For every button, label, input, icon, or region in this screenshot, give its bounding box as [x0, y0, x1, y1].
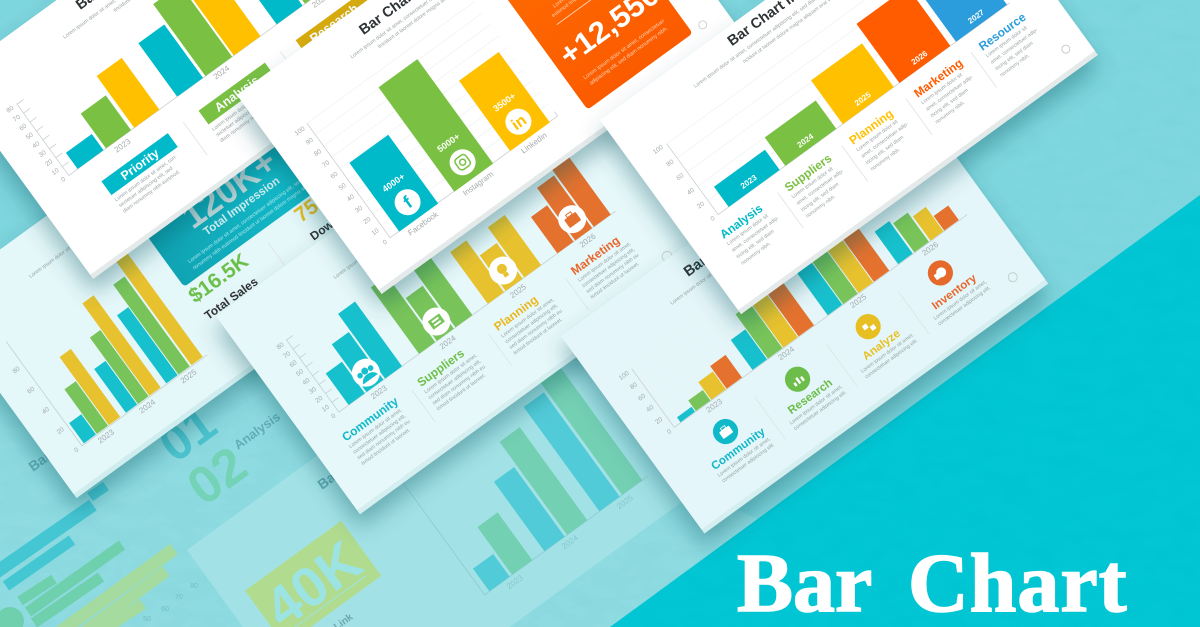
- grid and axis: 80: [313, 148, 323, 158]
- axis: 40: [41, 406, 51, 416]
- slide face: [0, 0, 450, 275]
- faded label Analysis: Analysis: [231, 409, 283, 452]
- column: suppliers: Lorem ipsum dolor sit amet,: [423, 353, 479, 395]
- bars 2023: [40, 58, 159, 169]
- column: analyze: Lorem ipsum dolor sit amet,: [860, 332, 915, 375]
- bars 2026: [875, 188, 959, 264]
- page number: [697, 19, 708, 30]
- bar: instagram: 5000+: [435, 131, 462, 154]
- bars 2024: [707, 262, 814, 370]
- column: resource: Lorem ipsum dolor sit: [985, 25, 1029, 59]
- faded year labels: 2025: [615, 493, 635, 511]
- panel: faded slide with grouped bars: [0, 37, 437, 498]
- grid and axis: [652, 0, 1012, 227]
- stat: downloads: Downloads: [307, 194, 368, 243]
- grouped bars: [4, 247, 203, 443]
- grid and axis: 40: [686, 187, 696, 197]
- card: total impression: nonummy nibh euismod tincidunt ut laoreet dolore magna aliquam: [192, 177, 318, 271]
- grid and axis: 60: [329, 170, 340, 181]
- faded axis: [395, 352, 648, 595]
- category labels: Linkedin: [519, 131, 549, 156]
- icon: marketing: [553, 200, 592, 239]
- grid lines and axis: 80: [629, 381, 639, 391]
- axis: 60: [26, 386, 37, 396]
- bar 2027: [898, 0, 1007, 42]
- column: planning: [847, 102, 919, 173]
- column: resource: iscing elit, sed diam: [994, 41, 1034, 72]
- column: resource: [976, 8, 1049, 79]
- axis: 0: [60, 176, 67, 184]
- tag: analysis: diam nonummy nibh euismod.: [219, 98, 279, 144]
- column: community: consectetuer adipiscing elit.: [721, 442, 776, 484]
- column: suppliers: sed diam nonummy nibh eu: [432, 364, 487, 407]
- column: community: Lorem ipsum dolor sit amet,: [348, 407, 403, 450]
- column: suppliers: [782, 149, 855, 220]
- column: community: sed diam nonummy nibh eu: [356, 419, 411, 461]
- grid lines and axis: 40: [645, 404, 656, 414]
- yellow bars: [450, 213, 541, 304]
- column: suppliers: Lorem ipsum dolor sit: [791, 166, 835, 200]
- column: research: [764, 350, 848, 432]
- tag: priority: Lorem ipsum dolor sit amet, con-: [114, 154, 179, 203]
- column: planning: ismod tincidunt ut laoreet.: [512, 317, 564, 356]
- column: marketing: sed diam nonummy nibh eu: [585, 252, 640, 295]
- faded slide: horizontal bars: [0, 486, 198, 627]
- card: total impression: Lorem ipsum dolor sit amet, consectetuer adipiscing elit, sed diam: [187, 171, 313, 265]
- faded title left: Bar Chart: [25, 424, 87, 474]
- column: suppliers: [414, 341, 491, 412]
- column: analysis: amet, consectetuer adip-: [731, 215, 781, 254]
- page number: [1060, 44, 1071, 55]
- column: planning: Lorem ipsum dolor sit: [855, 119, 899, 153]
- icon: instagram: [444, 144, 481, 180]
- bar 2023: 2023: [739, 173, 759, 191]
- faded year labels: 2024: [560, 533, 580, 551]
- column: planning: nonummy nibh.: [870, 147, 902, 173]
- column: community: consectetuer adipiscing elit,: [352, 413, 407, 456]
- slide face: [237, 0, 739, 290]
- grid and axis: 70: [321, 159, 331, 169]
- column: planning: iscing elit, sed diam: [865, 135, 905, 166]
- year labels: [704, 240, 941, 415]
- faded bar chart: [395, 352, 655, 605]
- axis: 10: [321, 403, 331, 414]
- axis: 0: [73, 446, 81, 454]
- panel: faded slide with icon bars: [216, 54, 720, 514]
- cyan bars: [302, 302, 402, 405]
- axis: 50: [295, 368, 305, 378]
- column: inventory: Lorem ipsum dolor sit amet,: [933, 279, 988, 322]
- background: lower-left pale wash: [0, 320, 760, 627]
- year labels: 2025: [508, 282, 528, 300]
- divider: [268, 242, 285, 266]
- tag: priority: [101, 133, 192, 215]
- axis: 20: [44, 158, 54, 168]
- bar: linkedin: [459, 52, 550, 151]
- category labels: Instagram: [461, 169, 495, 198]
- column: community: Community: [709, 426, 768, 473]
- bar: facebook: [349, 135, 438, 232]
- category labels: [406, 131, 549, 238]
- slide plate: [0, 37, 437, 498]
- axis: [5, 0, 386, 186]
- grid and axis: 20: [362, 216, 373, 226]
- panel: slide with priority bars: [0, 0, 453, 279]
- slide face: [216, 54, 717, 510]
- axis: [276, 137, 618, 423]
- column: resource: amet, consectetuer adip-: [990, 27, 1039, 66]
- year labels: 2026: [578, 231, 598, 250]
- tag: research: Research: [307, 1, 361, 46]
- icon: community: [346, 353, 386, 392]
- column: resource: Resource: [976, 10, 1029, 53]
- panel: slide with social media bars: [237, 0, 742, 294]
- faded axis labels: 60: [161, 606, 169, 613]
- bar: facebook: 4000+: [380, 171, 407, 194]
- faded number 02: 02: [177, 436, 258, 517]
- grid lines and axis: 60: [637, 392, 647, 403]
- faded icon circle: [0, 607, 24, 627]
- tag: analysis: Lorem ipsum dolor sit amet, con-: [211, 83, 276, 133]
- tag: analysis: Analysis: [212, 73, 262, 115]
- bar 2026: [856, 0, 950, 83]
- card: total impression: Total Impression: [202, 175, 282, 238]
- column: analysis: Analysis: [717, 201, 766, 242]
- dividers: [183, 51, 304, 155]
- bar 2027: 2027: [966, 8, 986, 26]
- card: orange statistic: adipiscing elit, sed diam nonummy nibh.: [589, 26, 669, 87]
- column: suppliers: iscing elit, sed diam: [800, 182, 840, 213]
- bar: instagram: [379, 59, 493, 192]
- column: community: Lorem ipsum dolor sit amet,: [717, 436, 772, 479]
- axis: 0: [330, 412, 338, 420]
- column: marketing: Lorem ipsum dolor sit: [920, 72, 964, 106]
- column: suppliers: ismod tincidunt ut laoreet.: [436, 373, 487, 412]
- bar: linkedin: 3500+: [491, 91, 517, 114]
- faded title middle: Bar Chart: [314, 442, 376, 492]
- grid and axis: 100: [652, 144, 665, 156]
- column: community: ismod tincidunt ut laoreet.: [360, 427, 412, 467]
- year labels: 2025: [848, 292, 869, 310]
- column: analysis: [717, 196, 790, 267]
- tag: analysis: [199, 63, 289, 144]
- bars 2024: [119, 0, 260, 97]
- grid and axis: 0: [382, 238, 389, 246]
- faded number 01: 01: [149, 395, 226, 473]
- column: planning: Lorem ipsum dolor sit amet,: [500, 297, 555, 339]
- column: inventory: Inventory: [930, 272, 979, 312]
- year labels: [96, 367, 199, 445]
- tag: research: [296, 0, 372, 54]
- faded bars: [400, 356, 642, 591]
- icon: suppliers: [417, 302, 456, 341]
- column: inventory: [907, 244, 992, 327]
- grid lines and axis: 0: [666, 428, 673, 436]
- column: marketing: Marketing: [568, 233, 622, 278]
- year labels: [112, 0, 331, 155]
- column: suppliers: Suppliers: [414, 346, 467, 390]
- axis: 30: [38, 149, 48, 159]
- faded slide: 40K card and bar chart: [187, 288, 695, 627]
- grid and axis: 40: [346, 193, 356, 203]
- column: inventory: consectetuer adipiscing elit.: [937, 285, 992, 327]
- column: suppliers: amet, consectetuer adip-: [795, 168, 845, 207]
- axis: 60: [289, 359, 299, 369]
- grid and axis: 0: [709, 215, 717, 223]
- stat: downloads: 75K: [290, 186, 335, 227]
- column: analysis: Lorem ipsum dolor sit: [726, 213, 770, 247]
- column: community: [692, 402, 776, 484]
- tag: priority: diam nonummy nibh euismod.: [122, 169, 182, 215]
- slide face: [600, 0, 1095, 310]
- bar 2025: [811, 43, 894, 124]
- faded horizontal bar set: [0, 486, 174, 627]
- column: community: [339, 394, 418, 467]
- page number: [1006, 271, 1019, 284]
- slide plate: [0, 0, 453, 279]
- title: Bar Chart Infographic: [345, 155, 475, 255]
- stat: total sales: $16.5K: [184, 249, 253, 308]
- axis: 70: [12, 113, 22, 124]
- year labels: 2024: [137, 397, 158, 415]
- column: research: Lorem ipsum dolor sit amet,: [789, 384, 844, 426]
- column: planning: amet, consectetuer adip-: [860, 121, 910, 160]
- grid and axis: 90: [305, 136, 315, 147]
- axis: 60: [18, 122, 29, 132]
- slide plate: [216, 54, 720, 514]
- grid and axis: 80: [665, 158, 676, 168]
- grid and axis: 100: [294, 125, 307, 137]
- column: marketing: nonummy nibh.: [934, 100, 966, 126]
- panel: slide with yearly step bars: [600, 0, 1098, 314]
- axis: 30: [308, 386, 318, 396]
- background: diagonal cyan band: [610, 195, 1200, 627]
- bar 2024: [765, 100, 836, 166]
- bar 2025: 2025: [853, 90, 873, 108]
- column: planning: [491, 285, 568, 356]
- column: suppliers: nonummy nibh.: [805, 194, 837, 220]
- axis: 80: [12, 365, 22, 375]
- axis: 40: [31, 140, 42, 150]
- grid lines and axis: [618, 154, 970, 440]
- bars 2023: [664, 355, 742, 422]
- grid and axis: 20: [696, 200, 706, 210]
- column: research: consectetuer adipiscing elit.: [793, 390, 848, 432]
- stat: downloads: [290, 171, 368, 243]
- axis: 20: [56, 426, 66, 436]
- icon: facebook: f: [399, 192, 417, 212]
- year labels: 2024: [438, 333, 458, 351]
- axis: 50: [25, 131, 35, 141]
- column: marketing: ismod tincidunt ut laoreet.: [589, 261, 641, 301]
- faded axis labels: 50: [143, 616, 151, 623]
- column: analyze: consectetuer adipiscing elit.: [864, 338, 919, 380]
- orange bars: [506, 143, 611, 253]
- bar 2026: 2026: [910, 49, 930, 67]
- axis: [0, 250, 210, 456]
- column: research: Research: [786, 377, 835, 417]
- bar 2023: [714, 150, 780, 207]
- column: analyze: Analyze: [861, 328, 903, 363]
- slide face: [0, 37, 434, 494]
- year labels: 2026: [920, 240, 941, 258]
- bars 2025: [218, 0, 331, 24]
- category labels: Facebook: [406, 209, 441, 238]
- page number: [660, 249, 674, 263]
- grid lines and axis: 20: [654, 416, 664, 426]
- grid and axis: 10: [371, 227, 381, 237]
- axis: 70: [282, 350, 292, 360]
- column: planning: sed diam nonummy nibh eu: [508, 308, 564, 351]
- column: analysis: iscing elit, sed diam: [735, 229, 776, 260]
- slide plate: [561, 86, 1048, 533]
- axis: 80: [5, 105, 16, 115]
- stat: total sales: [184, 249, 264, 323]
- tag: priority: sectetuer adipiscing elit, sed: [118, 166, 174, 209]
- slide plate: [600, 0, 1098, 314]
- axis: 40: [301, 377, 312, 387]
- faded slide: numbered list: [25, 395, 376, 517]
- axis: 20: [314, 395, 325, 405]
- grid and axis: 30: [354, 204, 364, 215]
- stat: total sales: Total Sales: [202, 274, 261, 323]
- column: marketing: amet, consectetuer adip-: [925, 74, 975, 113]
- column: marketing: Marketing: [911, 56, 965, 100]
- axis: 80: [276, 341, 286, 351]
- bars 2025: [781, 206, 889, 315]
- bar 2024: 2024: [796, 132, 816, 150]
- faded year labels: [505, 493, 635, 591]
- icon: linkedin: in: [509, 112, 530, 134]
- card: total impression: [115, 81, 336, 287]
- icon: planning: [484, 251, 523, 290]
- card: orange statistic: [495, 0, 693, 110]
- grid and axis: 50: [338, 182, 348, 192]
- column: analysis: nonummy nibh.: [740, 241, 772, 267]
- year labels: 2023: [704, 397, 725, 415]
- green bars: [371, 249, 472, 354]
- card: orange statistic: Lorem ipsum dolor sit amet, consectetuer: [583, 18, 666, 81]
- column: suppliers: Suppliers: [782, 151, 835, 194]
- axis: 10: [51, 167, 61, 177]
- dividers: [755, 292, 929, 439]
- column: resource: nonummy nibh.: [999, 53, 1031, 79]
- column: planning: Planning: [847, 106, 896, 147]
- slide face: [561, 86, 1045, 529]
- subtitle: Lorem ipsum dolor sit amet, consectetuer adipiscing elit, sed diam nonummy nibh euismod: [669, 179, 841, 307]
- year labels: 2024: [212, 63, 232, 81]
- panel: summary cards: [114, 76, 369, 323]
- faded axis labels: 80: [190, 583, 198, 590]
- faded year labels: 2023: [505, 573, 525, 591]
- column: marketing: Lorem ipsum dolor sit amet,: [577, 241, 632, 284]
- year labels: 2023: [96, 427, 116, 445]
- grid and axis: 60: [675, 172, 686, 182]
- column: planning: Planning: [491, 293, 541, 334]
- column: marketing: iscing elit, sed diam: [930, 88, 970, 119]
- dividers: [778, 52, 997, 228]
- year labels: 2023: [369, 383, 389, 401]
- year labels: 2025: [179, 367, 199, 385]
- tag: analysis: sectetuer adipiscing elit, sed: [215, 95, 271, 138]
- card: total impression: 120K+: [173, 140, 284, 236]
- subtitle: Lorem ipsum dolor sit amet, consectetuer adipiscing elit: [28, 199, 135, 280]
- panel: faded slide with four-series bars: [561, 86, 1048, 533]
- grid and axis: [294, 1, 560, 251]
- grid lines and axis: 100: [618, 370, 631, 382]
- year labels: 2024: [776, 344, 797, 362]
- dividers: [412, 278, 589, 422]
- slide plate: [237, 0, 742, 294]
- year labels: 2023: [113, 136, 133, 155]
- faded axis labels: [143, 583, 198, 623]
- faded axis labels: 70: [175, 594, 183, 601]
- column: marketing: [568, 229, 645, 301]
- subtitle: Lorem ipsum dolor sit amet, consectetuer adipiscing elit, sed diam nonummy nibh euismod: [333, 153, 505, 281]
- column: community: Community: [339, 394, 401, 444]
- column: marketing: [911, 55, 984, 126]
- year labels: [369, 231, 598, 401]
- column: suppliers: consectetuer adipiscing elit,: [427, 359, 482, 401]
- title: Bar Chart Infographic: [681, 180, 811, 280]
- tag: priority: Priority: [118, 146, 162, 183]
- faded slide plate: [187, 288, 695, 627]
- column: marketing: consectetuer adipiscing elit,: [581, 247, 636, 289]
- column: analyze: [835, 298, 919, 380]
- column: planning: consectetuer adipiscing elit,: [504, 303, 559, 345]
